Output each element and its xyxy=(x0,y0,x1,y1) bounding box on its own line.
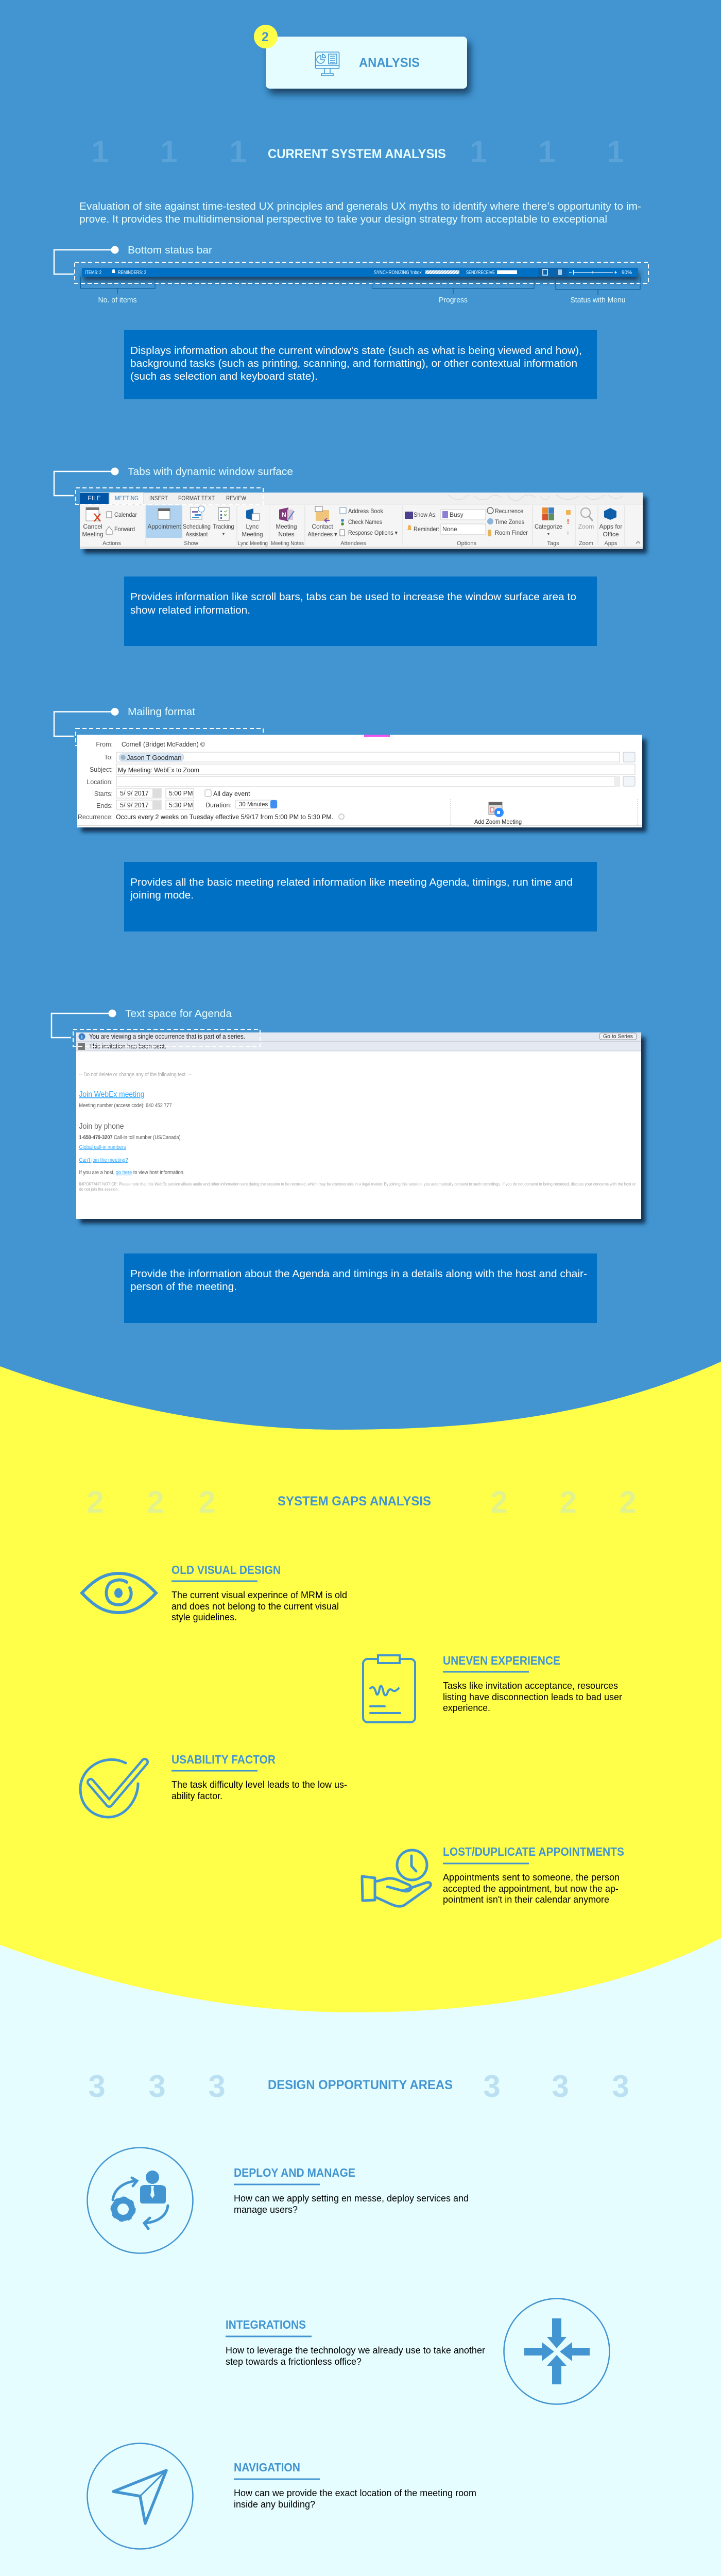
section heading: current system analysis: 1 xyxy=(91,134,109,169)
callout: text space for agenda label: Text space for Agenda xyxy=(125,1008,232,1020)
group: show: ▼ xyxy=(221,532,226,536)
description box: agenda xyxy=(124,1253,597,1323)
bracket: progress: Progress xyxy=(439,296,468,304)
from row: From: xyxy=(96,741,113,748)
icon: paper plane xyxy=(88,2443,193,2549)
agenda body text: Meeting number (access code): 640 452 777 xyxy=(79,1103,172,1109)
group: options: Busy xyxy=(450,511,464,518)
group: show: Scheduling xyxy=(183,523,211,530)
section heading: design opportunity areas: 3 xyxy=(88,2069,106,2104)
icon: monitor with pie chart xyxy=(315,52,339,76)
section heading: current system analysis: 1 xyxy=(160,134,178,169)
ribbon tabs: REVIEW xyxy=(226,495,247,502)
gap item: usability factor: USABILITY FACTOR xyxy=(171,1753,276,1766)
section heading: system gaps analysis: 2 xyxy=(490,1485,508,1519)
agenda body text: If you are a host, go here to view host information. xyxy=(79,1170,184,1176)
group: meeting notes: Meeting Notes xyxy=(271,540,304,547)
to row xyxy=(104,752,635,762)
to row: To: xyxy=(104,754,113,761)
group: tags: Tags xyxy=(547,540,559,547)
opportunity item: navigation: NAVIGATION xyxy=(234,2461,300,2474)
group: actions: Calendar xyxy=(114,511,137,518)
gap item: lost or duplicate appointments: accepted the appointment, but now the ap- xyxy=(443,1884,619,1894)
gap item: uneven experience: Tasks like invitation acceptance, resources xyxy=(443,1681,618,1691)
location row xyxy=(87,776,635,787)
opportunity item: deploy and manage: How can we apply setting en messe, deploy services and xyxy=(234,2193,469,2204)
group: actions: Forward xyxy=(114,526,135,533)
group: show: Show xyxy=(184,540,198,547)
section heading: system gaps analysis xyxy=(87,1485,637,1519)
section heading: system gaps analysis: 2 xyxy=(619,1485,637,1519)
opportunity item: integrations: step towards a frictionless office? xyxy=(226,2357,362,2367)
dashed highlight: status bar xyxy=(75,262,648,283)
ends row: 5/ 9/ 2017 xyxy=(120,802,149,809)
group: tags: ! xyxy=(567,517,569,526)
ribbon screenshot xyxy=(80,493,643,549)
group: show xyxy=(146,505,234,547)
subject row: My Meeting: WebEx to Zoom xyxy=(118,766,199,774)
opportunity item: deploy and manage: manage users? xyxy=(234,2205,298,2215)
group: tags: ▼ xyxy=(547,533,550,536)
gap item: uneven experience: listing have disconnection leads to bad user xyxy=(443,1692,622,1702)
ends row: 30 Minutes xyxy=(239,802,268,808)
intro paragraph xyxy=(79,201,641,225)
agenda body text: Join by phone xyxy=(79,1122,124,1131)
group: options: Options xyxy=(457,540,476,547)
section heading: current system analysis: 1 xyxy=(229,134,247,169)
opportunity item: integrations: How to leverage the technology we already use to take another xyxy=(226,2345,485,2355)
notice bars: Go to Series xyxy=(603,1033,633,1040)
group: options: Reminder: xyxy=(414,526,439,533)
subject row xyxy=(90,764,635,774)
description box: mailing format xyxy=(124,862,597,931)
gap item: lost or duplicate appointments: LOST/DUPLICATE APPOINTMENTS xyxy=(443,1845,624,1858)
gap item: lost or duplicate appointments xyxy=(362,1845,624,1906)
group: zoom: Zoom xyxy=(578,523,594,530)
starts row: 5/ 9/ 2017 xyxy=(120,790,149,797)
group: meeting notes: N xyxy=(282,511,286,518)
group: lync meeting: Lync xyxy=(246,523,259,530)
group: actions: Meeting xyxy=(82,531,103,538)
dashed highlight: ribbon tabs xyxy=(76,488,263,504)
agenda body text xyxy=(79,1072,636,1192)
section heading: design opportunity areas: 3 xyxy=(208,2069,226,2104)
mail form screenshot xyxy=(77,735,642,827)
icon: check in circle xyxy=(80,1759,145,1817)
group: actions xyxy=(82,507,137,547)
group: options: Time Zones xyxy=(495,518,524,526)
analysis header card xyxy=(254,25,467,89)
bracket: status with menu: Status with Menu xyxy=(571,296,625,304)
group: show: Tracking xyxy=(213,523,234,530)
to row: Jason T Goodman xyxy=(127,754,181,761)
status bar screenshot: REMINDERS: 2 xyxy=(118,270,146,276)
description box: tabs: Provides information like scroll bars, tabs can be used to increase the window surface area to xyxy=(130,591,576,603)
ribbon tabs: MEETING xyxy=(115,495,139,502)
gap item: old visual design xyxy=(82,1563,347,1622)
ribbon tabs xyxy=(80,493,247,504)
description box: status bar xyxy=(124,330,597,399)
location row: Location: xyxy=(87,778,113,786)
description box: tabs: show related information. xyxy=(130,605,250,616)
icon: hand holding clock xyxy=(362,1850,431,1906)
intro paragraph: prove. It provides the multidimensional perspective to take your design strategy from acceptable to exceptional xyxy=(79,214,607,225)
description box: mailing format: Provides all the basic meeting related information like meeting Agenda, timings, run time and xyxy=(130,877,573,888)
section heading: current system analysis: 1 xyxy=(607,134,624,169)
opportunity item: integrations: INTEGRATIONS xyxy=(226,2318,306,2331)
background: blue section xyxy=(0,0,721,1430)
agenda body text: 1-650-479-3207 Call-in toll number (US/Canada) xyxy=(79,1134,180,1141)
agenda body text: IMPORTANT NOTICE: Please note that this WebEx service allows audio and other information sent during the session to be recorded, which may be discoverable in a legal matter. By joining this session, you automatically consent to such recordings. If you do not consent to being recorded, discuss your concerns with the host or xyxy=(79,1181,636,1187)
gap item: usability factor: The task difficulty level leads to the low us- xyxy=(171,1780,347,1790)
group: actions: Cancel xyxy=(83,523,102,530)
section heading: current system analysis: 1 xyxy=(538,134,556,169)
group: tags: ↓ xyxy=(566,529,570,536)
group: meeting notes: Meeting xyxy=(276,523,297,530)
section heading: system gaps analysis: 2 xyxy=(198,1485,216,1519)
agenda body text: Can't join the meeting? xyxy=(79,1157,128,1163)
section heading: system gaps analysis: 2 xyxy=(147,1485,164,1519)
ends row xyxy=(96,800,277,809)
ribbon separators xyxy=(145,505,625,545)
status bar screenshot xyxy=(82,268,638,277)
section heading: design opportunity areas xyxy=(88,2069,629,2104)
group: lync meeting xyxy=(238,509,268,547)
group: lync meeting: Lync Meeting xyxy=(238,540,268,547)
agenda body text: -- Do not delete or change any of the following text. -- xyxy=(79,1072,192,1078)
group: options: None xyxy=(442,526,457,533)
notice bars: i xyxy=(81,1035,82,1040)
ends row: Ends: xyxy=(96,802,113,809)
bracket: number of items: No. of items xyxy=(98,296,137,304)
group: tags: Categorize xyxy=(535,523,562,530)
starts row: All day event xyxy=(213,790,250,798)
callout: mailing format label xyxy=(54,706,195,736)
group: options: Room Finder xyxy=(495,529,528,536)
opportunity item: deploy and manage: DEPLOY AND MANAGE xyxy=(234,2166,355,2179)
opportunity item: integrations xyxy=(226,2299,610,2404)
group: tags xyxy=(535,507,571,547)
group: apps: Office xyxy=(603,531,619,538)
bracket: progress xyxy=(372,277,534,304)
group: options xyxy=(405,507,528,547)
group: attendees: Check Names xyxy=(348,518,382,526)
group: show: Assistant xyxy=(185,531,208,538)
group: meeting notes xyxy=(271,507,304,547)
gap item: old visual design: OLD VISUAL DESIGN xyxy=(171,1563,281,1577)
group: attendees: Attendees ▾ xyxy=(308,531,337,538)
starts row: Starts: xyxy=(94,790,113,798)
agenda email screenshot xyxy=(76,1032,641,1219)
icon: four inward arrows xyxy=(504,2299,610,2404)
starts row: 5:00 PM xyxy=(169,790,193,797)
from row: Cornell (Bridget McFadden) © xyxy=(122,741,205,748)
group: zoom xyxy=(578,508,594,547)
ribbon tabs: FILE xyxy=(88,495,101,502)
group: attendees: Contact xyxy=(312,523,333,530)
agenda body text: Global call-in numbers xyxy=(79,1144,126,1150)
add zoom meeting button xyxy=(451,799,638,825)
group: options: Show As: xyxy=(414,511,437,518)
dashed highlight: mail header xyxy=(76,728,263,745)
opportunity item: navigation xyxy=(88,2443,476,2549)
group: options: Recurrence xyxy=(495,507,523,515)
background: pale cyan section xyxy=(0,1938,721,2576)
icon: clipboard with pulse xyxy=(363,1655,415,1722)
status bar screenshot: SYNCHRONIZING 'Inbox' xyxy=(374,270,422,276)
ribbon tabs: INSERT xyxy=(149,495,168,502)
section heading: system gaps analysis: 2 xyxy=(559,1485,577,1519)
description box: status bar: (such as selection and keyboard state). xyxy=(130,371,318,382)
callout: bottom status bar label xyxy=(54,245,212,274)
bracket: status with menu xyxy=(556,277,640,304)
gap item: lost or duplicate appointments: Appointments sent to someone, the person xyxy=(443,1872,620,1883)
description box: tabs xyxy=(124,577,597,646)
gap item: old visual design: style guidelines. xyxy=(171,1612,237,1622)
group: meeting notes: Notes xyxy=(278,531,295,538)
section heading: current system analysis: 1 xyxy=(470,134,487,169)
recurrence row: Recurrence: xyxy=(78,814,113,821)
opportunity item: navigation: How can we provide the exact location of the meeting room xyxy=(234,2488,476,2498)
section heading: design opportunity areas: 3 xyxy=(552,2069,569,2104)
starts row xyxy=(94,788,250,798)
gap item: old visual design: and does not belong to the current visual xyxy=(171,1601,339,1612)
section heading: design opportunity areas: DESIGN OPPORTUNITY AREAS xyxy=(268,2078,453,2092)
opportunity item: navigation: inside any building? xyxy=(234,2499,315,2510)
callout: text space for agenda label xyxy=(52,1008,232,1038)
notice bars xyxy=(76,1032,641,1051)
badge: number 2: 2 xyxy=(262,30,269,44)
gap item: uneven experience: UNEVEN EXPERIENCE xyxy=(443,1654,560,1667)
group: actions: Actions xyxy=(102,540,122,547)
gap item: uneven experience: experience. xyxy=(443,1703,490,1713)
intro paragraph: Evaluation of site against time-tested UX principles and generals UX myths to identify where there’s opportunity to im- xyxy=(79,201,641,212)
group: apps: Apps for xyxy=(599,523,622,530)
callout: bottom status bar label: Bottom status bar xyxy=(128,245,212,256)
notice bars: This invitation has been sent. xyxy=(89,1043,166,1050)
group: show: Appointment xyxy=(147,523,181,530)
callout: tabs label xyxy=(54,466,293,496)
ends row: 5:30 PM xyxy=(169,802,193,809)
opportunity item: deploy and manage xyxy=(88,2147,469,2253)
group: lync meeting: Meeting xyxy=(242,531,263,538)
section heading: design opportunity areas: 3 xyxy=(148,2069,166,2104)
gap item: uneven experience xyxy=(363,1654,622,1722)
description box: status bar: Displays information about the current window's state (such as what is being viewed and how), xyxy=(130,345,582,357)
section heading: design opportunity areas: 3 xyxy=(612,2069,629,2104)
description box: agenda: person of the meeting. xyxy=(130,1281,237,1293)
ends row: Duration: xyxy=(205,802,232,809)
status bar screenshot: 90% xyxy=(622,270,632,276)
description box: status bar: background tasks (such as printing, scanning, and formatting), or other contextual information xyxy=(130,358,577,369)
group: attendees: Attendees xyxy=(340,540,366,547)
group: apps xyxy=(599,508,640,547)
agenda body text: Join WebEx meeting xyxy=(79,1090,144,1099)
section heading: current system analysis xyxy=(91,134,624,169)
description box: mailing format: joining mode. xyxy=(130,890,194,901)
card title: ANALYSIS xyxy=(359,56,420,70)
callout: mailing format label: Mailing format xyxy=(128,706,195,718)
status bar screenshot: SEND/RECEIVE xyxy=(466,270,495,276)
ribbon tabs: FORMAT TEXT xyxy=(178,495,215,502)
section heading: system gaps analysis: SYSTEM GAPS ANALYSIS xyxy=(278,1494,431,1509)
gap item: usability factor xyxy=(80,1753,347,1817)
section heading: current system analysis: CURRENT SYSTEM ANALYSIS xyxy=(268,147,446,161)
section heading: design opportunity areas: 3 xyxy=(483,2069,501,2104)
group: attendees: Response Options ▾ xyxy=(348,529,398,536)
badge: number 2 xyxy=(254,25,278,48)
icon: eye xyxy=(82,1573,156,1613)
group: attendees xyxy=(308,506,398,547)
gap item: usability factor: ability factor. xyxy=(171,1791,222,1801)
gap item: old visual design: The current visual experince of MRM is old xyxy=(171,1590,347,1600)
bracket: number of items xyxy=(80,277,155,304)
agenda body text: do not join the session. xyxy=(79,1187,118,1192)
description box: agenda: Provide the information about the Agenda and timings in a details along with the host and chair- xyxy=(130,1268,587,1280)
gap item: lost or duplicate appointments: pointment isn't in their calendar anymore xyxy=(443,1894,609,1905)
recurrence row: Occurs every 2 weeks on Tuesday effective 5/9/17 from 5:00 PM to 5:30 PM. xyxy=(116,814,333,821)
subject row: Subject: xyxy=(90,766,113,773)
status bar screenshot: ITEMS: 2 xyxy=(85,270,101,276)
group: attendees: Address Book xyxy=(348,507,384,515)
add zoom meeting button: Add Zoom Meeting xyxy=(474,818,522,825)
notice bars: You are viewing a single occurrence that is part of a series. xyxy=(89,1033,245,1040)
callout: tabs label: Tabs with dynamic window surface xyxy=(128,466,293,478)
group: apps: Apps xyxy=(604,540,617,547)
dashed highlight: agenda notice xyxy=(73,1029,260,1046)
group: zoom: Zoom xyxy=(579,540,593,547)
section heading: system gaps analysis: 2 xyxy=(87,1485,104,1519)
icon: user, gear and cycle arrows xyxy=(88,2147,193,2253)
